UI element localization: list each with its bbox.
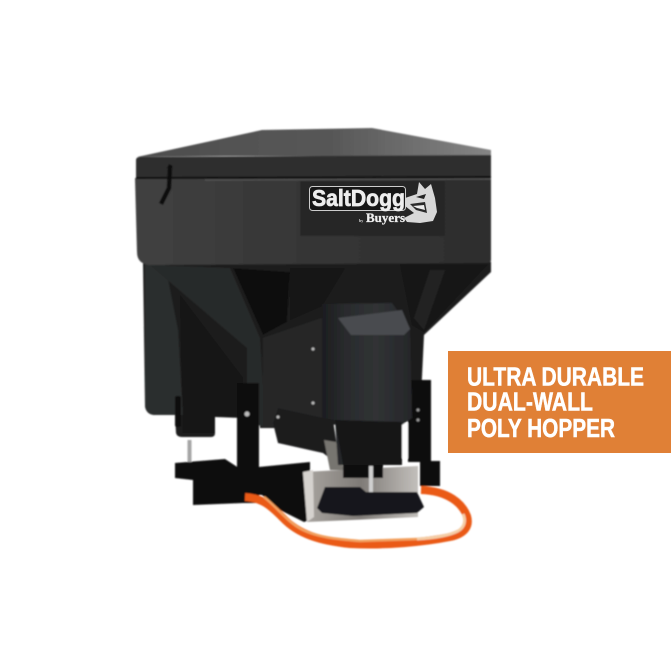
logo wordmark: SaltDogg [312, 185, 405, 211]
mounting bracket [175, 380, 440, 522]
callout: orange feature banner [448, 351, 671, 453]
spreader product illustration [135, 128, 491, 545]
lid seam [136, 177, 491, 178]
banner text: DUAL-WALL [467, 388, 593, 416]
banner text [467, 364, 644, 443]
logo Buyers: Buyers [366, 210, 405, 225]
lid front band [136, 155, 491, 178]
spinner chute [276, 303, 412, 492]
steel chute plate [303, 466, 418, 522]
white gap beside chute [402, 423, 408, 458]
banner background [448, 351, 671, 453]
motor housing [273, 408, 344, 470]
logo label background [300, 181, 445, 236]
lid top [137, 128, 491, 157]
hopper upper box [135, 177, 491, 265]
orange guard bar [245, 490, 468, 545]
banner text: POLY HOPPER [467, 415, 615, 443]
SaltDogg logo [310, 182, 437, 225]
logo outline [310, 186, 406, 210]
logo byline: by [359, 218, 363, 223]
hopper lower body [143, 262, 491, 437]
icon: dog head mascot [404, 182, 437, 223]
lid latch [161, 166, 170, 204]
spinner disc [317, 487, 424, 516]
